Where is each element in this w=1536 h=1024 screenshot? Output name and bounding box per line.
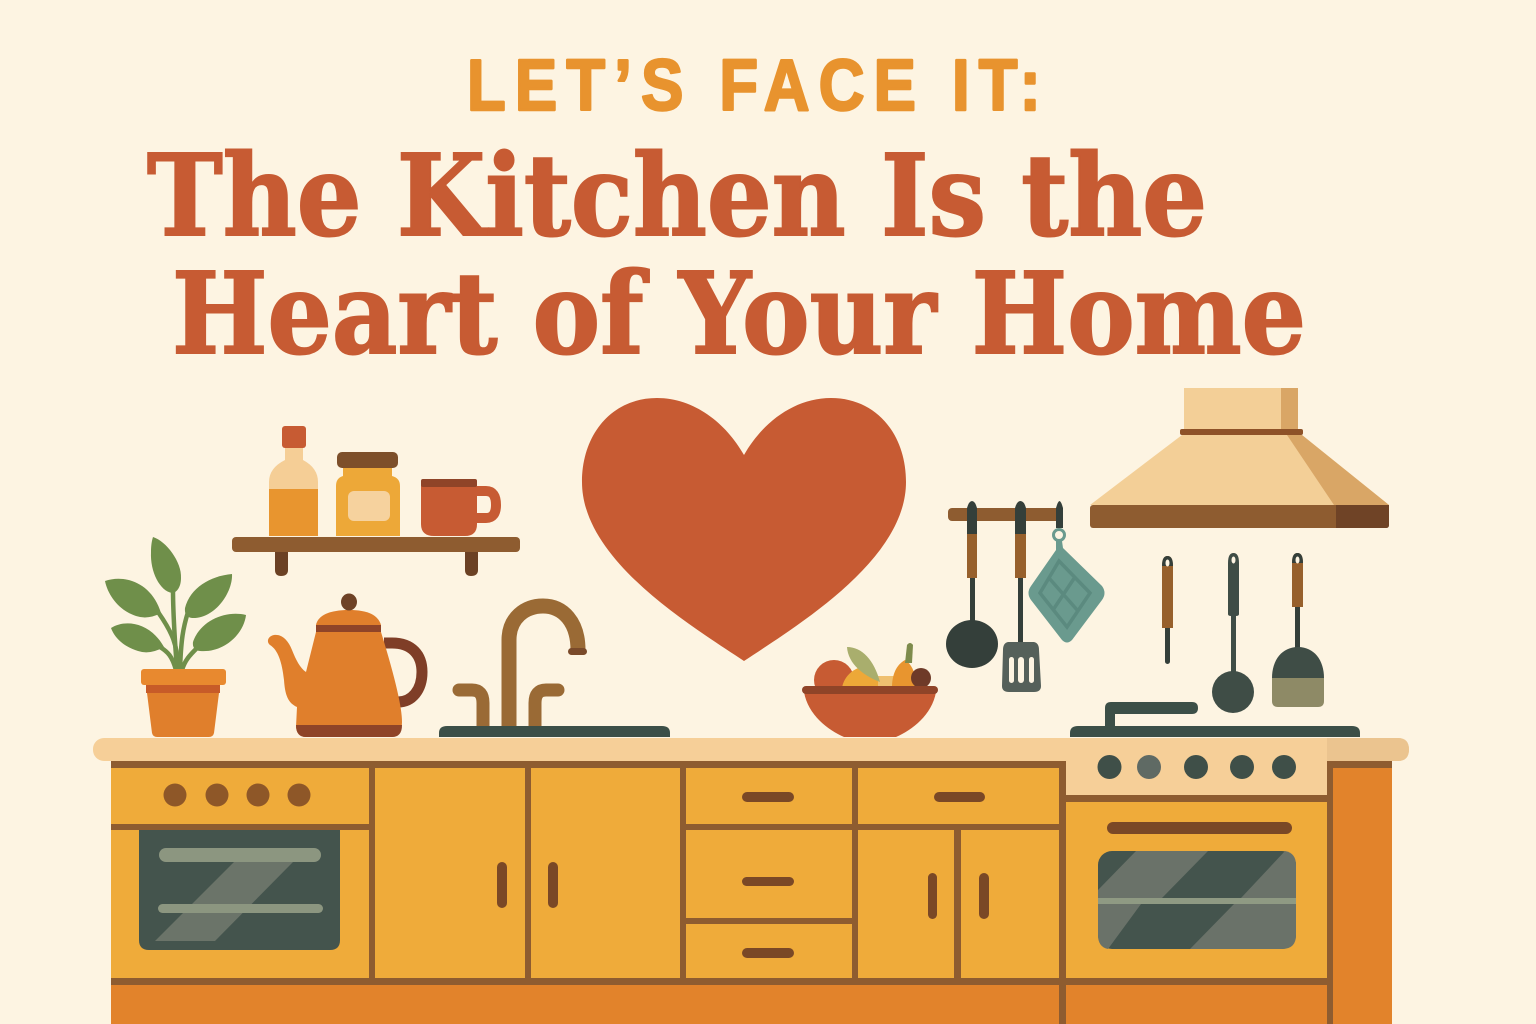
icon: mug bbox=[421, 479, 496, 536]
icon: range hood bbox=[1090, 388, 1389, 528]
icon: hanging tool one bbox=[1162, 556, 1173, 664]
left oven bbox=[139, 784, 340, 950]
cabinet handles bbox=[497, 792, 989, 958]
cabinet base unit bbox=[111, 761, 1392, 1024]
oven window bbox=[139, 830, 340, 950]
oven window bbox=[1098, 851, 1296, 949]
icon: jar bbox=[336, 452, 400, 536]
oven knobs bbox=[164, 784, 310, 806]
wall shelf with items bbox=[232, 426, 520, 576]
icon: pan on cooktop bbox=[1070, 702, 1360, 737]
right range bbox=[1060, 738, 1392, 949]
rail bbox=[948, 508, 1060, 521]
toe kick panels bbox=[111, 768, 1392, 1024]
icon: kettle bbox=[268, 594, 422, 737]
range control panel bbox=[1066, 738, 1327, 795]
icon: large heart bbox=[582, 398, 906, 661]
icon: potted plant bbox=[105, 537, 246, 737]
icon: pot holder bbox=[1028, 501, 1104, 642]
cabinet doors and drawers bbox=[111, 768, 1327, 978]
shelf board bbox=[232, 537, 520, 552]
utensil rail with hanging tools bbox=[946, 501, 1104, 692]
oven handle bbox=[1107, 822, 1292, 834]
title: main headline: Heart of Your Home bbox=[172, 249, 1306, 380]
countertop bbox=[93, 738, 1409, 761]
icon: ladle bbox=[946, 501, 998, 668]
icon: faucet and sink bbox=[439, 606, 670, 737]
icon: fruit bowl bbox=[802, 643, 938, 737]
icon: hanging turner bbox=[1272, 553, 1324, 707]
title: main headline bbox=[147, 131, 1306, 380]
icon: hanging ladle bbox=[1212, 553, 1254, 713]
cabinet frame bbox=[111, 761, 1333, 1024]
icon: bottle bbox=[269, 426, 318, 536]
icon: slotted spatula bbox=[1002, 501, 1041, 692]
range knobs bbox=[1098, 755, 1296, 779]
title: main headline: The Kitchen Is the bbox=[147, 131, 1207, 262]
title: kicker: LET’S FACE IT: bbox=[467, 46, 1041, 126]
shelf brackets bbox=[275, 552, 478, 576]
